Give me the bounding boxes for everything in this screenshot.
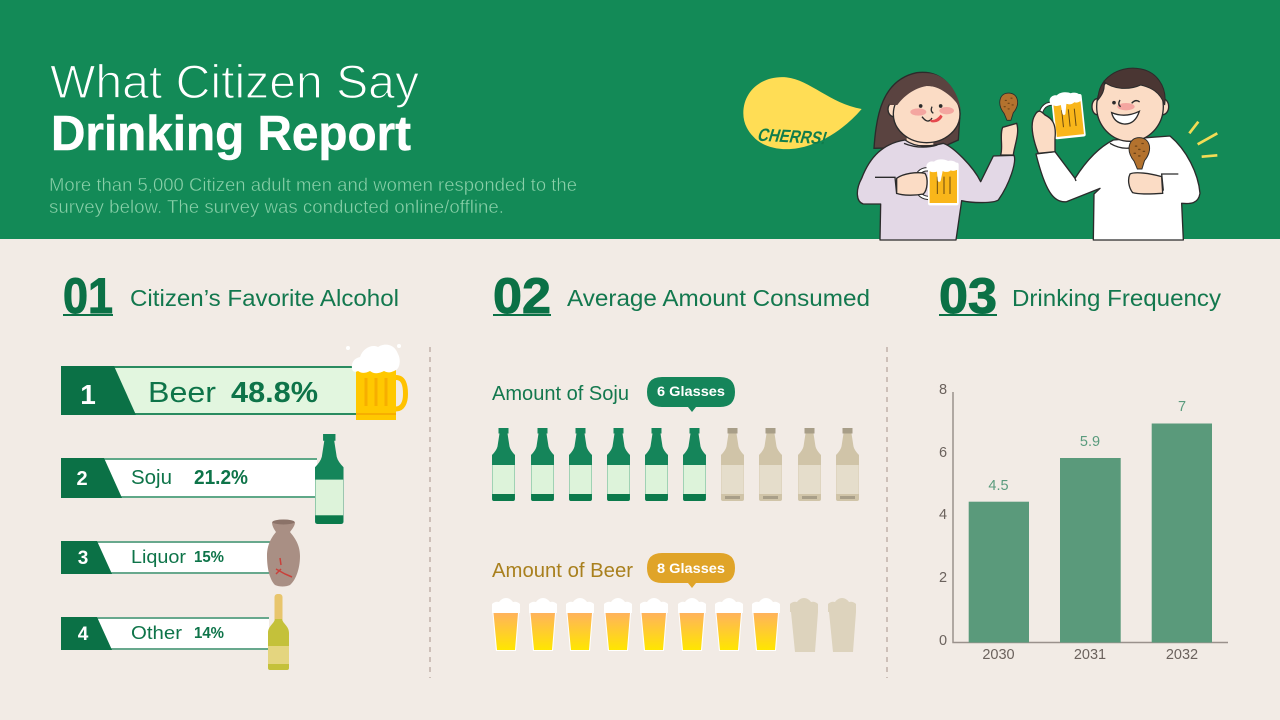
illustration: cheers speech bubble: CHERRS! <box>755 124 830 148</box>
illustration: woman with beer and chicken <box>857 72 1018 240</box>
callout: 6 glasses: 6 Glasses <box>657 383 725 399</box>
subtitle text: More than 5,000 Citizen adult men and women responded to the <box>49 175 577 195</box>
section 03 heading <box>939 268 1222 324</box>
subtitle text <box>49 175 577 217</box>
panel: favorite alcohol ranking <box>61 344 406 670</box>
y axis labels: 8 <box>939 382 947 398</box>
y axis labels: 0 <box>939 633 947 649</box>
section 01 heading: 01 <box>63 268 113 324</box>
section 01 heading <box>63 268 399 324</box>
icon: ceramic liquor jar <box>267 520 300 586</box>
y axis labels: 2 <box>939 570 947 586</box>
y axis labels <box>939 382 947 649</box>
rank 1 beer: Beer <box>148 377 216 409</box>
rank 4 other: Other <box>131 623 182 643</box>
rank 1 beer: 48.8% <box>231 377 318 409</box>
callout: 8 glasses: 8 Glasses <box>657 560 725 576</box>
header banner <box>0 0 1280 240</box>
year labels <box>982 647 1198 663</box>
value labels: 5.9 <box>1080 434 1100 450</box>
title: Drinking Report <box>51 107 411 161</box>
rank 2 soju: 21.2% <box>194 467 248 489</box>
callout: 8 glasses <box>647 553 735 588</box>
y axis labels: 4 <box>939 507 947 523</box>
value labels: 4.5 <box>988 478 1009 494</box>
beer glass row <box>492 598 856 652</box>
rank 2 soju <box>61 434 344 524</box>
illustration: man with beer and chicken <box>1032 68 1217 240</box>
bar chart: drinking frequency <box>939 382 1228 663</box>
section 02 heading <box>493 268 870 324</box>
rank 4 other <box>61 594 289 670</box>
rank 3 liquor: Liquor <box>131 547 186 567</box>
rank 2 soju: 2 <box>76 468 88 490</box>
illustration: cheers speech bubble <box>743 77 862 149</box>
title <box>50 55 420 161</box>
soju bottle row <box>492 428 859 501</box>
rank 1 beer <box>61 344 406 420</box>
section 02 heading: 02 <box>493 268 551 324</box>
value labels: 7 <box>1178 399 1186 415</box>
rank 3 liquor: 15% <box>194 549 224 566</box>
icon: soju bottle <box>315 434 344 524</box>
rank 3 liquor: 3 <box>78 548 88 569</box>
icon: beer mug <box>346 344 406 420</box>
section 01 heading: Citizen’s Favorite Alcohol <box>130 285 399 311</box>
y axis labels: 6 <box>939 445 947 461</box>
rank 4 other: 14% <box>194 625 224 642</box>
value labels <box>988 399 1186 494</box>
subtitle text: survey below. The survey was conducted online/offline. <box>49 197 504 217</box>
soju label: Amount of Soju <box>492 383 629 405</box>
bars <box>969 424 1212 642</box>
rank 1 beer: 1 <box>80 379 96 410</box>
rank 3 liquor <box>61 520 300 586</box>
section 03 heading: Drinking Frequency <box>1012 285 1222 311</box>
rank 4 other: 4 <box>78 624 89 645</box>
title: What Citizen Say <box>50 55 420 108</box>
panel: average amount consumed <box>492 377 859 652</box>
year labels: 2032 <box>1166 647 1198 663</box>
section 02 heading: Average Amount Consumed <box>567 285 870 311</box>
rank 2 soju: Soju <box>131 467 172 489</box>
section 03 heading: 03 <box>939 268 997 324</box>
icon: champagne bottle <box>268 594 289 670</box>
callout: 6 glasses <box>647 377 735 412</box>
beer label: Amount of Beer <box>492 560 633 582</box>
year labels: 2030 <box>982 647 1015 663</box>
year labels: 2031 <box>1074 647 1106 663</box>
